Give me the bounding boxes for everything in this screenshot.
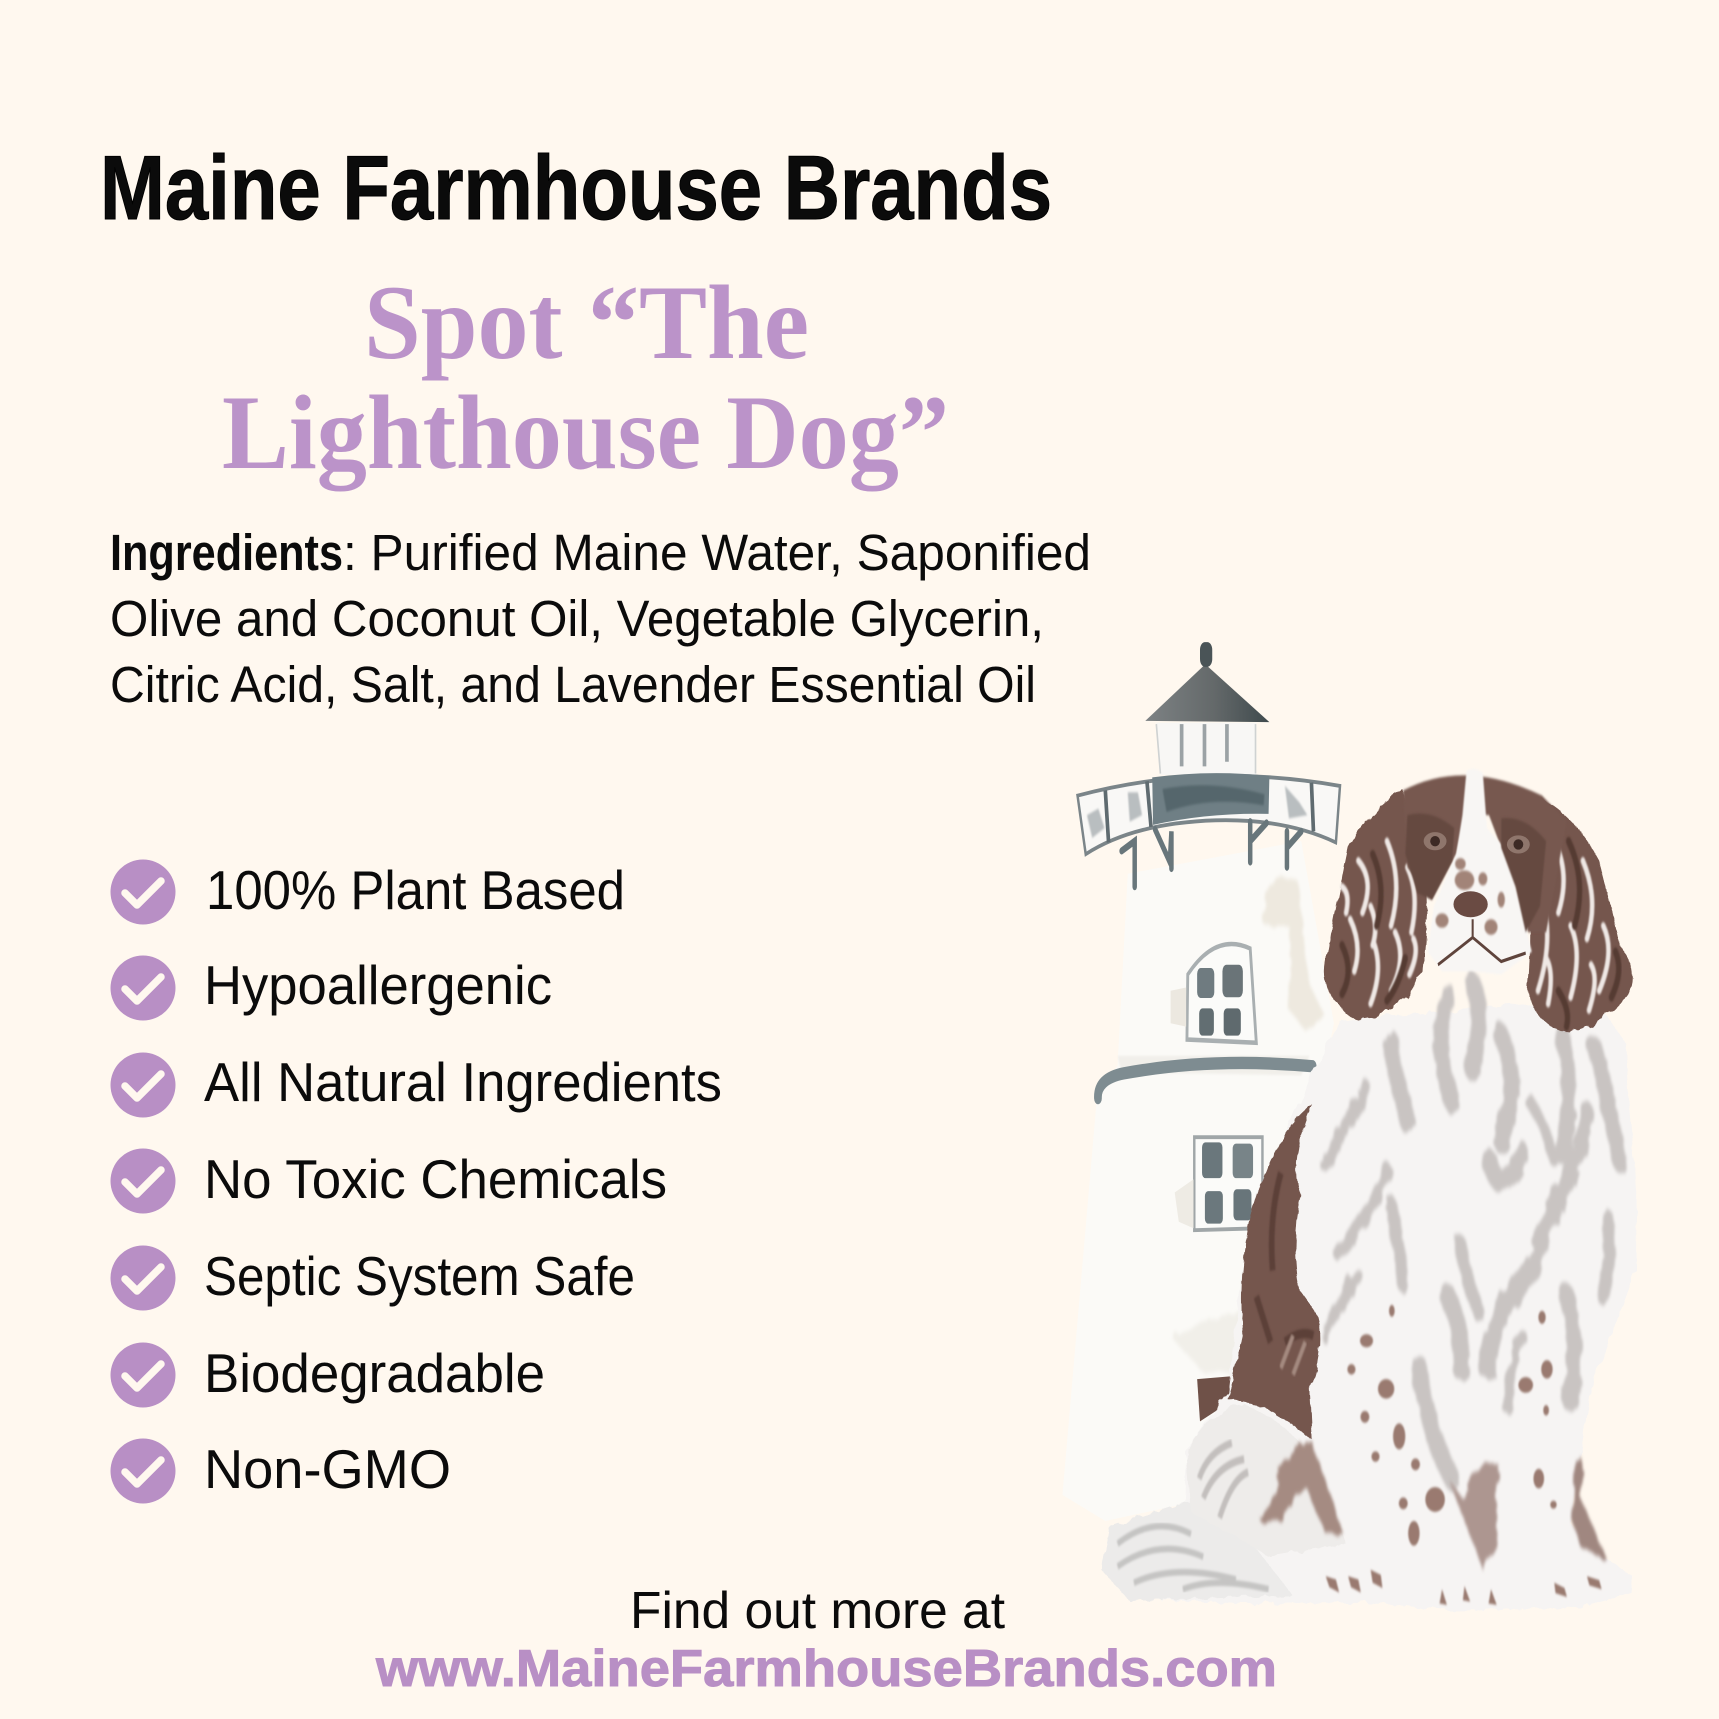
tower stripe: [1098, 1063, 1313, 1098]
brown flank: [1227, 1105, 1320, 1441]
head cap: [1403, 775, 1567, 932]
item: Biodegradable: Biodegradable: [204, 1342, 545, 1404]
right ear: [1526, 799, 1632, 1033]
ingredients text block: Olive and Coconut Oil, Vegetable Glycerin,: [110, 590, 1044, 647]
fur strokes: [1326, 984, 1620, 1479]
ingredients text block: Citric Acid, Salt, and Lavender Essential Oil: [110, 656, 1036, 713]
item: Septic System Safe: Septic System Safe: [204, 1245, 635, 1307]
face and muzzle: [1405, 769, 1546, 975]
chest brown streak: [1448, 1462, 1499, 1573]
gallery brackets: [1122, 822, 1301, 887]
lower window: [1175, 1137, 1262, 1230]
dog haunch: [1186, 1404, 1346, 1557]
lantern roof: [1145, 664, 1269, 722]
footer call to action: [375, 1582, 1277, 1698]
ingredients text block: [110, 524, 1091, 713]
product name heading: Lighthouse Dog”: [222, 374, 949, 491]
item: Hypoallergenic: Hypoallergenic: [204, 954, 552, 1016]
dog tail: [1101, 1501, 1293, 1601]
lighthouse tower: [1062, 841, 1334, 1521]
footer call to action: Find out more at: [630, 1582, 1006, 1640]
item: 100% Plant Based: 100% Plant Based: [206, 859, 625, 921]
dog body fur: [1101, 1004, 1637, 1610]
item: No Toxic Chemicals: No Toxic Chemicals: [204, 1148, 667, 1210]
leg patch: [1260, 1440, 1344, 1534]
lighthouse: [1062, 642, 1340, 1521]
item: Non-GMO: [110, 1438, 451, 1504]
dog rear leg edge: [1573, 1459, 1607, 1560]
lantern room: [1156, 723, 1256, 775]
dog spots: [1326, 1305, 1602, 1605]
product name heading: Spot “The: [364, 264, 809, 381]
spaniel dog: [1101, 769, 1637, 1610]
item: Non-GMO: Non-GMO: [204, 1438, 451, 1500]
muzzle spots: [1436, 858, 1505, 935]
ingredients text block: : Purified Maine Water, Saponified: [343, 524, 1091, 581]
nose: [1453, 891, 1488, 917]
item: All Natural Ingredients: All Natural Ingredients: [204, 1051, 722, 1113]
benefits checklist: [110, 859, 722, 1504]
door: [1197, 1376, 1236, 1421]
upper window: [1171, 944, 1256, 1043]
title: Maine Farmhouse Brands: [100, 138, 1052, 239]
left ear: [1324, 790, 1427, 1020]
ingredients text block: Ingredients: [110, 524, 343, 581]
website link: www.MaineFarmhouseBrands.com: [375, 1640, 1277, 1698]
illustration: lighthouse and dog: [1062, 642, 1637, 1610]
mouth: [1438, 919, 1526, 965]
gallery: [1078, 773, 1340, 854]
finial: [1200, 642, 1212, 667]
eyes: [1424, 832, 1530, 854]
product name heading: [222, 264, 949, 491]
